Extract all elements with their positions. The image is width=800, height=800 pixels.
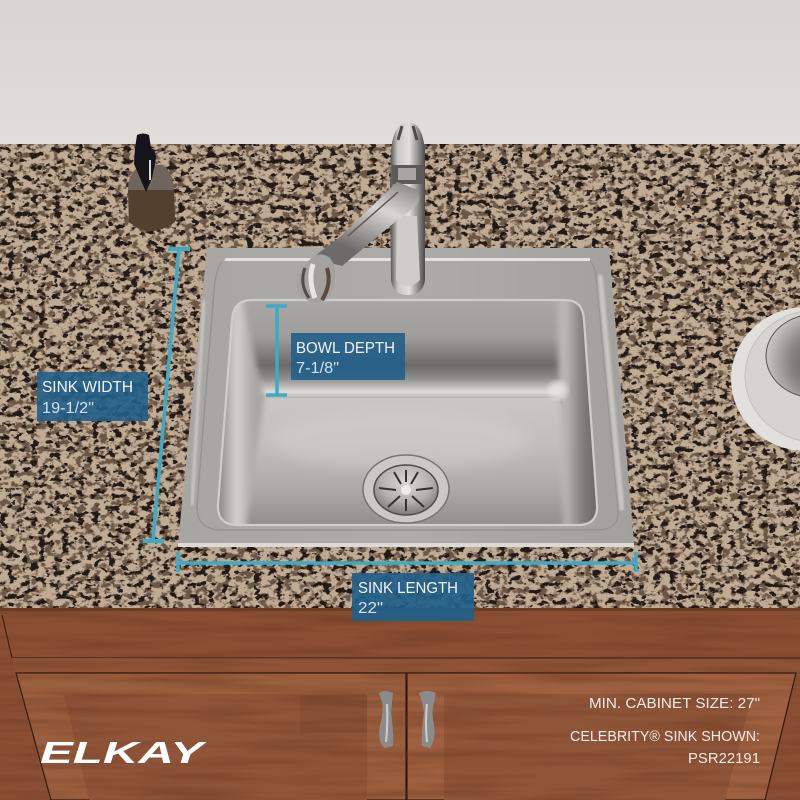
door handles [379, 691, 436, 748]
dimension: sink length [178, 552, 636, 572]
sink bowl [219, 301, 596, 524]
wall background [0, 0, 800, 144]
faucet [297, 122, 425, 303]
sink deck [178, 248, 634, 544]
label: sink width: SINK WIDTH [42, 379, 133, 396]
label: sink width [37, 372, 148, 421]
plate and bowl on the right [731, 307, 800, 451]
cabinet size note: CELEBRITY® SINK SHOWN: [570, 728, 760, 745]
cabinet size note: MIN. CABINET SIZE: 27" [589, 695, 760, 712]
logo: Elkay: ELKAY [40, 735, 208, 770]
label: sink length: 22" [358, 600, 383, 617]
dimension: bowl depth [266, 306, 287, 395]
drain [363, 455, 449, 523]
stainless sink [178, 248, 634, 547]
pull-out spout [297, 182, 420, 303]
label: sink length [352, 573, 474, 621]
soap dispenser [128, 134, 175, 231]
faucet body [390, 122, 425, 295]
label: bowl depth [291, 333, 405, 380]
label: bowl depth: BOWL DEPTH [296, 340, 395, 357]
label: bowl depth: 7-1/8" [296, 360, 339, 377]
cabinet size note: PSR22191 [688, 750, 760, 767]
label: sink length: SINK LENGTH [358, 580, 458, 597]
right cabinet door [407, 673, 796, 800]
label: sink width: 19-1/2" [42, 400, 94, 417]
left cabinet door [16, 673, 406, 800]
base cabinet [0, 608, 800, 800]
dimension: sink width [143, 249, 190, 541]
granite countertop [0, 144, 800, 610]
cabinet size note [570, 695, 760, 767]
